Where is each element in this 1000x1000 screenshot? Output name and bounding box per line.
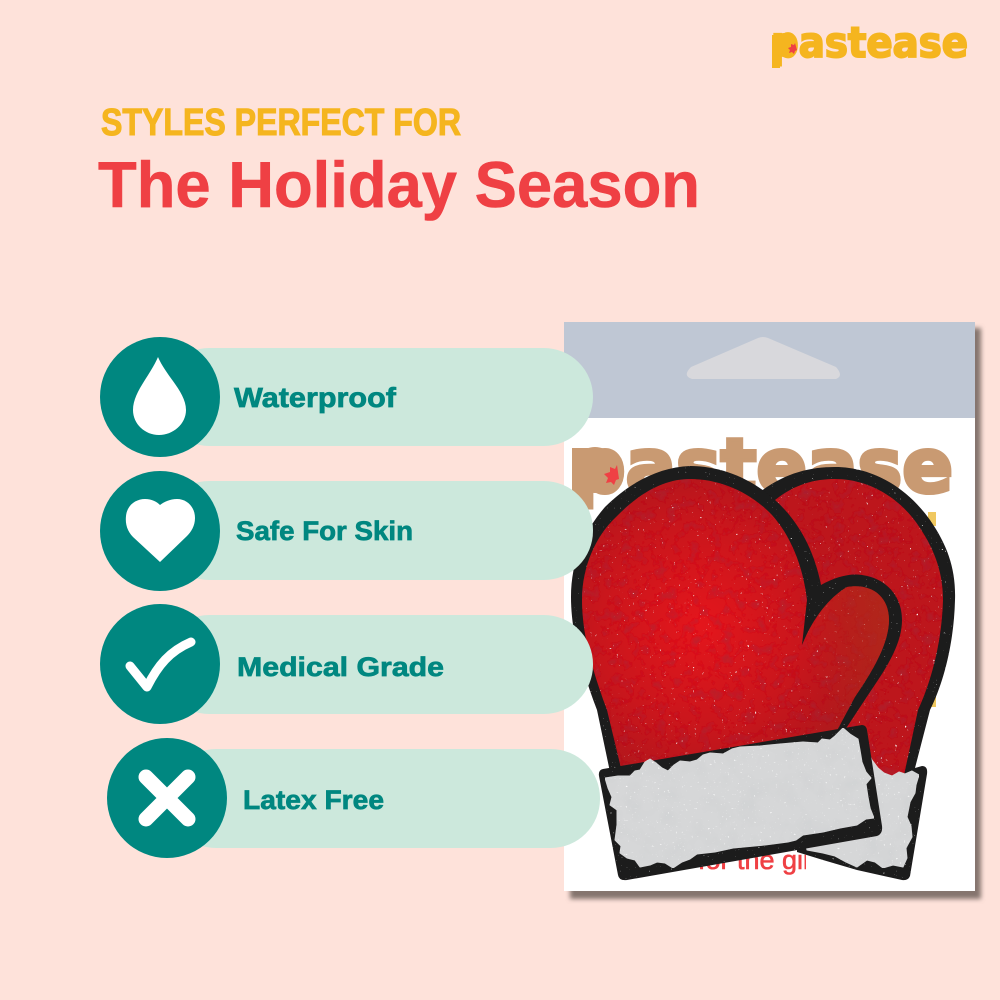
- icon: heart: [126, 499, 195, 562]
- pill: [160, 615, 593, 714]
- package small yellow print: [928, 512, 936, 707]
- feature: waterproof: [100, 337, 593, 457]
- heading: styles perfect for: STYLES PERFECT FOR: [101, 102, 461, 144]
- package tagline: for the girls: [698, 845, 832, 875]
- product package: [564, 322, 981, 899]
- back mitten: [760, 467, 955, 880]
- icon: check mark: [130, 642, 191, 687]
- package shadow: [570, 328, 981, 899]
- label: Safe For Skin: [236, 516, 413, 546]
- feature: medical grade: [100, 604, 593, 724]
- icon circle: [100, 604, 220, 724]
- icon: water drop: [133, 357, 186, 435]
- icon circle: [107, 738, 227, 858]
- cuff outline: [599, 725, 882, 880]
- pill: [160, 481, 593, 580]
- brand logo: pastease: [771, 18, 968, 67]
- mitten red body: [582, 479, 889, 790]
- pill: [167, 749, 600, 848]
- feature: latex free: [107, 738, 600, 858]
- icon: cross: [146, 777, 188, 819]
- icon circle: [100, 337, 220, 457]
- pill: [160, 348, 593, 446]
- hang hole: [687, 337, 840, 379]
- mitten thumb tint: [780, 586, 889, 735]
- label: Medical Grade: [237, 652, 444, 682]
- feature: safe for skin: [100, 471, 593, 591]
- heading: the holiday season: The Holiday Season: [98, 148, 700, 221]
- cuff white fur: [605, 728, 874, 868]
- icon circle: [100, 471, 220, 591]
- label: Latex Free: [243, 785, 384, 815]
- front mitten: [571, 466, 902, 880]
- label: Waterproof: [234, 382, 397, 413]
- package header band: [564, 322, 975, 418]
- mitten outline: [571, 466, 902, 790]
- package logo: pastease: [572, 422, 953, 510]
- package card: [564, 322, 975, 891]
